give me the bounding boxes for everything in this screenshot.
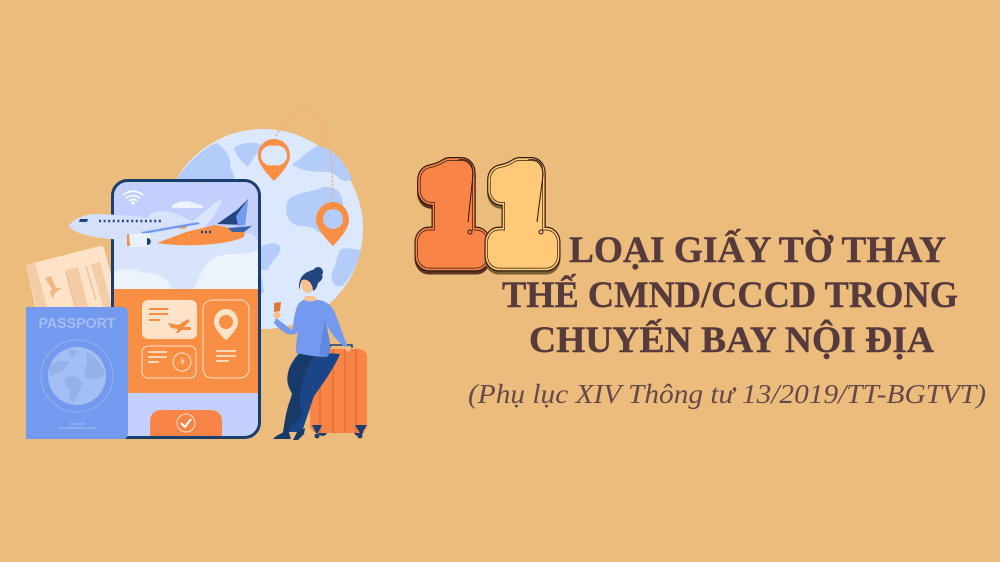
hair	[299, 270, 323, 291]
dashed route	[276, 110, 333, 198]
digit 1 orange: 1	[420, 123, 483, 290]
boarding ticket	[26, 246, 144, 420]
head and neck	[301, 277, 317, 302]
digit 1 yellow: 1	[490, 123, 553, 290]
sky	[114, 211, 258, 289]
card: location	[203, 300, 249, 378]
title	[502, 228, 958, 361]
digit 1 yellow: 1	[490, 123, 553, 290]
hand and phone card	[274, 312, 280, 318]
title: CHUYẾN BAY NỘI ĐỊA	[529, 318, 934, 361]
digit 1 orange: 1	[420, 123, 483, 290]
orange panel	[114, 289, 258, 393]
shoes	[273, 428, 305, 440]
digit 1 orange: 1	[420, 123, 483, 290]
title: LOẠI GIẤY TỜ THAY	[569, 228, 946, 271]
title: THẾ CMND/CCCD TRONG	[502, 273, 958, 316]
digit 1 yellow: 1	[490, 126, 553, 293]
suitcase	[310, 345, 367, 438]
icon: map pin 1	[258, 139, 290, 181]
passport globe emblem	[41, 340, 113, 412]
icon: wifi	[123, 191, 143, 204]
confirm button	[150, 410, 222, 436]
sweater	[274, 299, 347, 357]
airplane	[69, 198, 252, 247]
subtitle: (Phụ lục XIV Thông tư 13/2019/TT-BGTVT)	[468, 379, 986, 409]
digit 1 yellow: 1	[490, 123, 553, 290]
legs	[283, 351, 340, 432]
card: time	[142, 346, 196, 378]
passport	[26, 307, 128, 439]
big number 11	[420, 123, 553, 293]
card: flight	[142, 300, 197, 339]
woman	[273, 267, 351, 440]
digit 1 orange: 1	[420, 126, 483, 293]
digit 1 orange: 1	[420, 123, 483, 290]
icon: map pin 2	[316, 202, 349, 246]
globe	[163, 129, 363, 329]
phone	[112, 180, 260, 438]
illustration: travel app scene	[26, 110, 367, 440]
digit 1 yellow: 1	[490, 123, 553, 290]
digit highlights	[458, 160, 543, 234]
passport label: PASSPORT	[38, 315, 116, 332]
